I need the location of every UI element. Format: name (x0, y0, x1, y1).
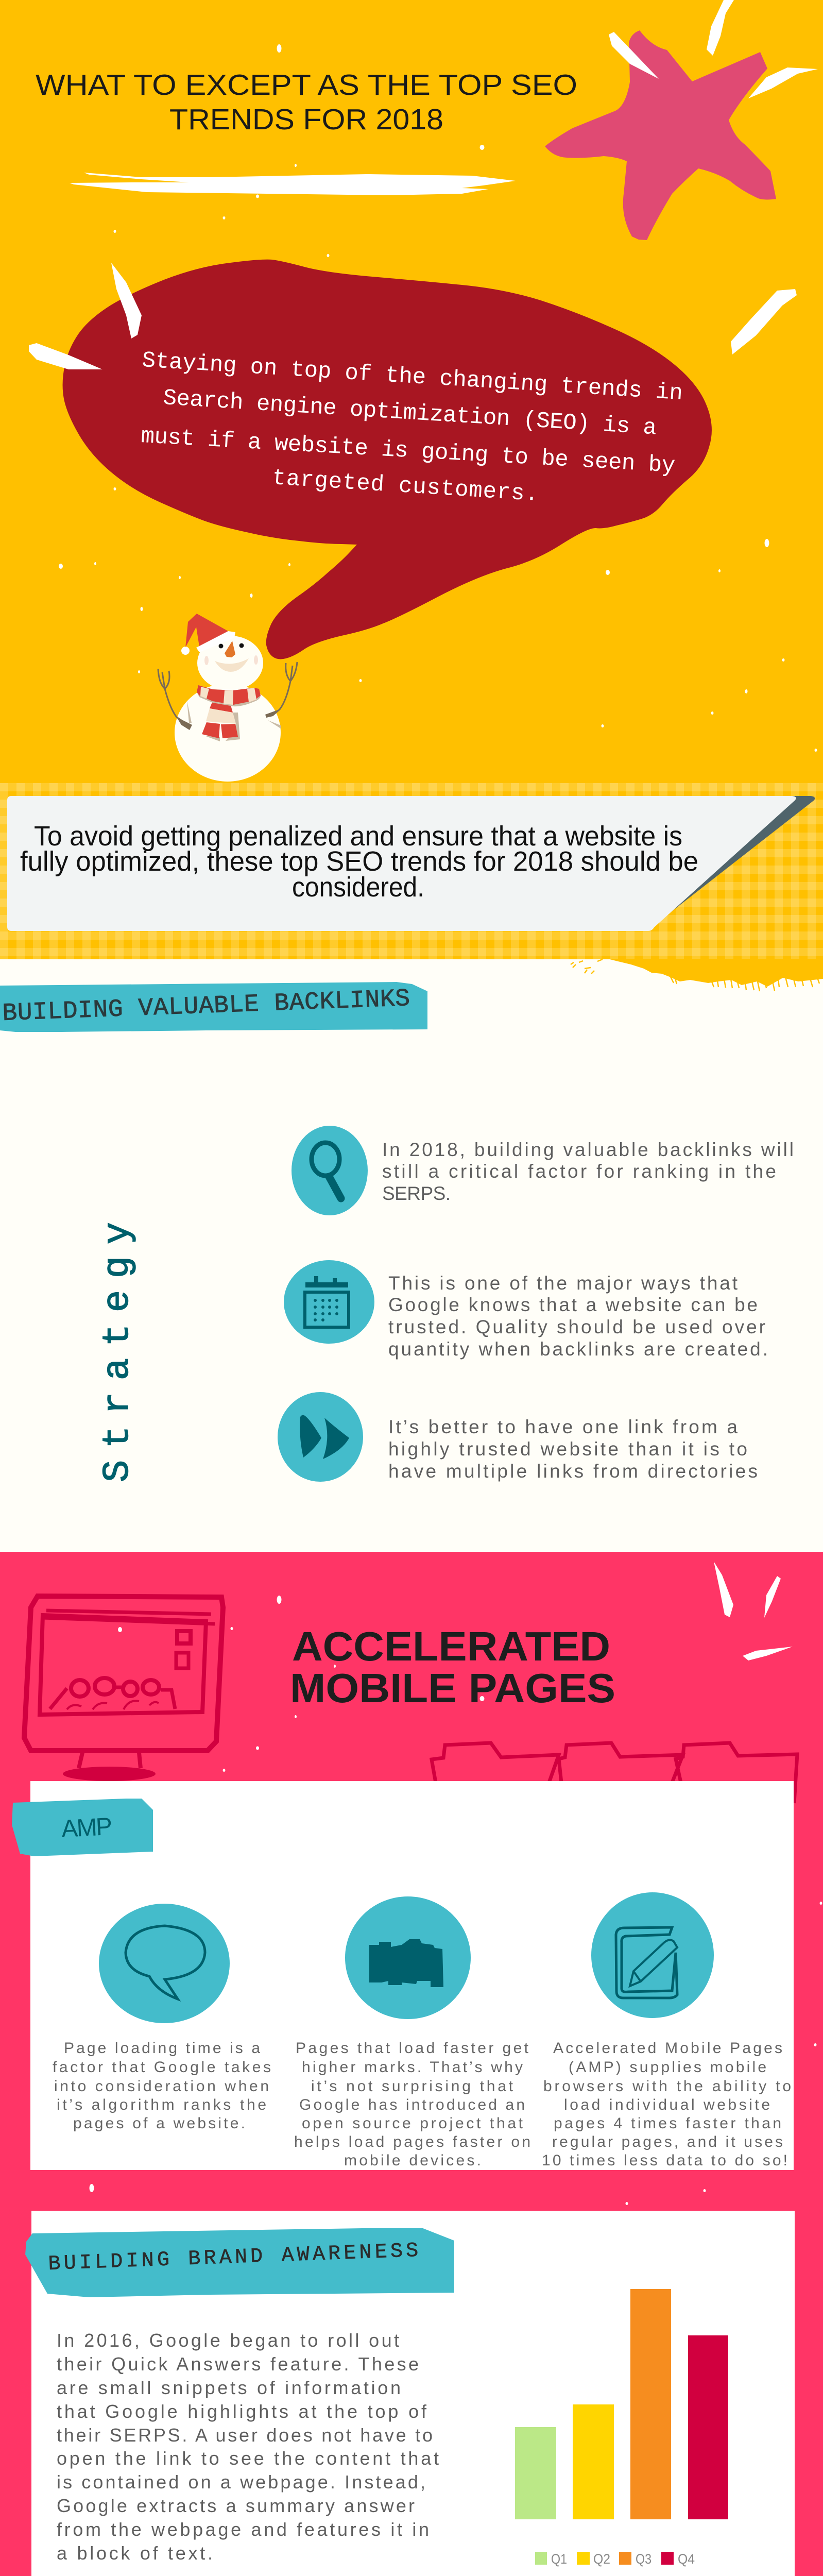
column text: AMP speed: Accelerated Mobile Pages (553, 2040, 782, 2057)
item: calendar icon (284, 1260, 374, 1344)
title: TRENDS FOR 2018 (169, 103, 443, 136)
section: intro yellow background (0, 0, 823, 783)
column text: page loading (53, 2040, 271, 2132)
snow dots: pink section (90, 1596, 822, 2576)
item text: one trusted link (388, 1416, 758, 1482)
callout text: fully optimized, these top SEO trends for 2018 should be (20, 846, 698, 877)
column text: page loading: into consideration when (54, 2078, 269, 2095)
column text: AMP speed: regular pages, and it uses (552, 2133, 783, 2150)
item text: one trusted link: It’s better to have one link from a (388, 1416, 738, 1437)
paragraph: quick answers: their Quick Answers feature. These (57, 2353, 419, 2375)
item text: google trust: trusted. Quality should be used over (388, 1316, 765, 1337)
chart legend: Q4 (678, 2551, 695, 2567)
column text: faster pages: mobile devices. (344, 2152, 481, 2169)
panel: building brand awareness (25, 2211, 795, 2576)
illustration: monitor (24, 1596, 223, 1781)
icon: bars block (345, 1896, 471, 2019)
chart legend: Q1 (551, 2551, 567, 2567)
item text: one trusted link: highly trusted website than it is to (388, 1438, 747, 1460)
callout shadow (649, 796, 815, 925)
item text: backlinks factor: In 2018, building valuable backlinks will (382, 1139, 794, 1160)
chart legend: Q3 (636, 2551, 651, 2567)
panel: AMP (12, 1781, 794, 2170)
tag: building brand awareness: BUILDING BRAND AWARENESS (48, 2240, 419, 2276)
paragraph: quick answers: are small snippets of information (57, 2377, 401, 2398)
bubble text: Staying on top of the changing trends in (141, 348, 683, 406)
icon: tablet with pencil (591, 1892, 714, 2018)
white brush underline (70, 173, 516, 195)
item: magnifier icon (292, 1126, 368, 1215)
item text: google trust: Google knows that a website can be (388, 1294, 758, 1315)
paragraph: quick answers: In 2016, Google began to roll out (57, 2330, 399, 2351)
column text: faster pages: Pages that load faster get (296, 2040, 529, 2057)
chart legend: Q2 (593, 2551, 610, 2567)
paragraph: quick answers: open the link to see the content that (57, 2448, 439, 2469)
item text: backlinks factor: still a critical factor for ranking in the (382, 1161, 776, 1182)
item text: google trust (388, 1273, 768, 1360)
paragraph: quick answers: a block of text. (57, 2543, 213, 2564)
column text: AMP speed: pages 4 times faster than (554, 2115, 781, 2132)
decoration: yellow brush edge (571, 959, 823, 991)
bubble text (140, 348, 683, 507)
speech bubble (63, 260, 712, 659)
illustration: folders (432, 1743, 797, 1803)
column text: faster pages: it’s not surprising that (311, 2078, 513, 2095)
column text: faster pages (294, 2040, 530, 2169)
paragraph: quick answers: is contained on a webpage. Instead, (57, 2471, 425, 2493)
column text: page loading: factor that Google takes (53, 2059, 271, 2076)
column text: faster pages: higher marks. That’s why (302, 2059, 523, 2076)
section: backlinks background (0, 959, 823, 1552)
callout text: To avoid getting penalized and ensure that a website is (34, 821, 682, 852)
column text: AMP speed: 10 times less data to do so! (542, 2152, 787, 2169)
decoration: pink star (545, 30, 776, 240)
paragraph: quick answers (57, 2330, 439, 2564)
column text: AMP speed (542, 2040, 791, 2169)
item text: backlinks factor (382, 1139, 794, 1204)
icon: speech bubble (99, 1904, 230, 2023)
vertical label: strategy: Strategy (97, 1222, 139, 1482)
title (36, 69, 577, 136)
section: plaid band with callout (0, 783, 823, 959)
callout text (20, 821, 698, 903)
item text: backlinks factor: SERPS. (382, 1183, 451, 1204)
bubble text: must if a website is going to be seen by (140, 423, 676, 479)
column text: page loading: Page loading time is a (64, 2040, 260, 2057)
heading tag: building valuable backlinks: BUILDING VALUABLE BACKLINKS (2, 985, 410, 1028)
column text: AMP speed: load individual website (564, 2096, 770, 2113)
decoration: white brush strokes around bubble (29, 263, 797, 369)
bar: Q4 (688, 2335, 728, 2519)
heading: accelerated mobile pages: ACCELERATED (292, 1623, 610, 1669)
bar: Q2 (573, 2404, 614, 2519)
item text: one trusted link: have multiple links from directories (388, 1461, 758, 1482)
illustration: snowman (158, 614, 297, 782)
item: fast forward icon (278, 1392, 363, 1482)
bar: Q3 (630, 2289, 671, 2519)
heading: accelerated mobile pages (290, 1623, 615, 1711)
column text: AMP speed: browsers with the ability to (543, 2078, 791, 2095)
callout card (7, 796, 796, 931)
bubble text: targeted customers. (271, 465, 539, 507)
bubble text: Search engine optimization (SEO) is a (162, 385, 657, 442)
title: WHAT TO EXCEPT AS THE TOP SEO (36, 69, 577, 101)
decoration: white brush strokes (714, 1562, 793, 1660)
column text: faster pages: open source project that (302, 2115, 523, 2132)
callout text: considered. (292, 872, 424, 903)
decoration: white brush strokes around star (609, 0, 818, 98)
bar chart (515, 2289, 728, 2567)
tag: building brand awareness (25, 2228, 454, 2297)
paragraph: quick answers: that Google highlights at the top of (57, 2401, 427, 2422)
item text: google trust: quantity when backlinks are created. (388, 1338, 768, 1360)
column text: page loading: pages of a website. (73, 2115, 245, 2132)
column text: page loading: it’s algorithm ranks the (57, 2096, 266, 2113)
paragraph: quick answers: from the webpage and features it in (57, 2519, 429, 2540)
tag: AMP (12, 1799, 153, 1856)
section: accelerated mobile pages background (0, 1552, 823, 2576)
column text: faster pages: Google has introduced an (299, 2096, 525, 2113)
tag: AMP: AMP (61, 1813, 113, 1843)
bar: Q1 (515, 2427, 556, 2519)
paragraph: quick answers: their SERPS. A user does not have to (57, 2425, 433, 2446)
snow dots: intro (59, 44, 817, 752)
chart legend (535, 2551, 695, 2567)
column text: AMP speed: (AMP) supplies mobile (569, 2059, 766, 2076)
paragraph: quick answers: Google extracts a summary answer (57, 2495, 415, 2516)
item text: google trust: This is one of the major ways that (388, 1273, 738, 1294)
column text: faster pages: helps load pages faster on (294, 2133, 530, 2150)
heading: accelerated mobile pages: MOBILE PAGES (290, 1665, 615, 1711)
